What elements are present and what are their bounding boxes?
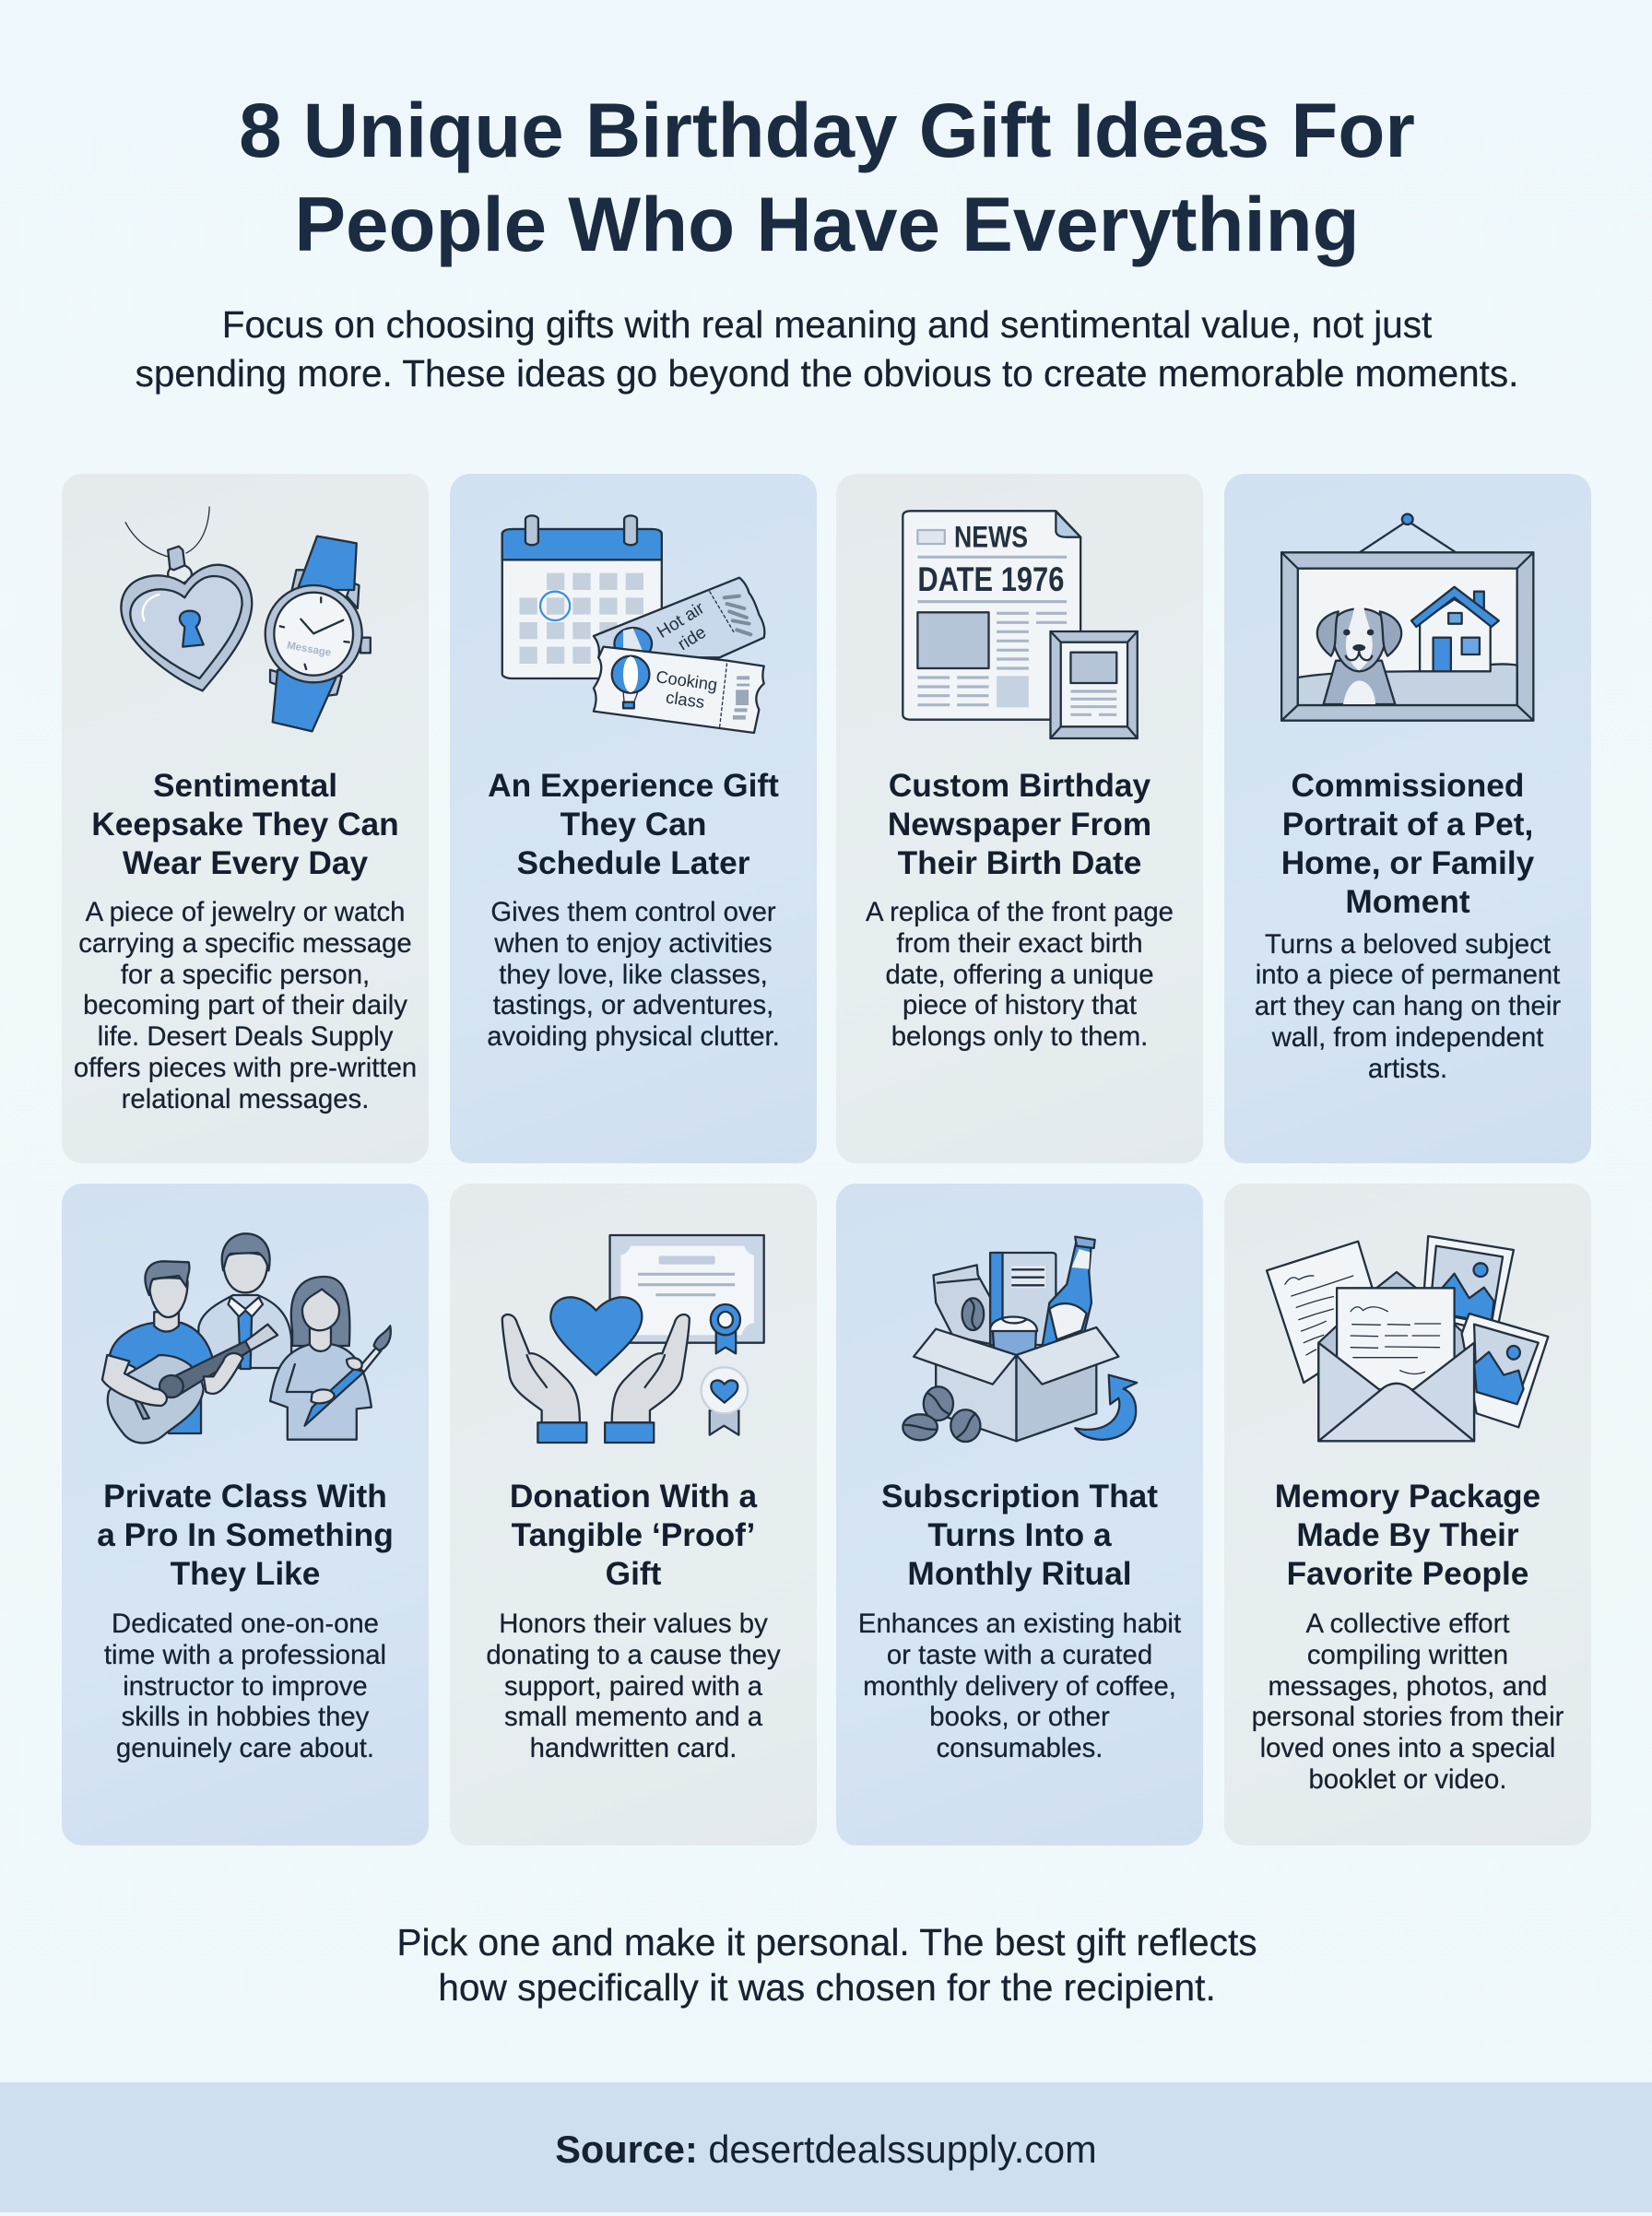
- title: 8 Unique Birthday Gift Ideas For: [239, 87, 1415, 173]
- card text: handwritten card.: [530, 1733, 737, 1763]
- card text: tastings, or adventures,: [493, 990, 773, 1020]
- card text: Portrait of a Pet,: [1282, 807, 1533, 843]
- card text: a Pro In Something: [97, 1517, 394, 1553]
- card text: Gives them control over: [490, 897, 776, 927]
- guitarist: [102, 1261, 277, 1443]
- card text: An Experience Gift: [488, 768, 779, 804]
- subtitle: Focus on choosing gifts with real meaning and sentimental value, not just: [222, 303, 1432, 346]
- instructor: [198, 1233, 291, 1369]
- card text: they love, like classes,: [499, 960, 768, 990]
- panel: sentimental keepsake: [62, 474, 429, 1163]
- envelope front: [1318, 1343, 1474, 1441]
- house: [1411, 587, 1499, 671]
- card text: life. Desert Deals Supply: [98, 1021, 393, 1052]
- footer: source: Source: desertdealssupply.com: [555, 2128, 1097, 2171]
- card text: [486, 1479, 781, 1763]
- closing message: Pick one and make it personal. The best gift reflects: [396, 1921, 1257, 1963]
- hands and heart: [502, 1297, 690, 1443]
- top right photo: [1422, 1236, 1514, 1334]
- card text: Turns Into a: [927, 1517, 1112, 1553]
- panel: private class: [62, 1184, 429, 1845]
- card text: Tangible ‘Proof’: [512, 1517, 755, 1553]
- card text: A piece of jewelry or watch: [86, 897, 405, 927]
- card text: becoming part of their daily: [83, 990, 407, 1020]
- locket necklace: [121, 507, 252, 690]
- card text: [865, 768, 1174, 1052]
- card text: Custom Birthday: [889, 768, 1150, 804]
- card text: personal stories from their: [1252, 1702, 1564, 1732]
- card text: consumables.: [937, 1733, 1103, 1763]
- card text: offers pieces with pre-written: [74, 1053, 417, 1083]
- newspaper: [903, 511, 1080, 720]
- card text: [97, 1479, 394, 1763]
- book: [990, 1253, 1056, 1345]
- card text: Subscription That: [881, 1479, 1158, 1515]
- card text: books, or other: [929, 1702, 1110, 1732]
- card text: wall, from independent: [1272, 1022, 1543, 1053]
- card text: [1252, 1479, 1564, 1795]
- icon: letters, photos, envelope: [1265, 1235, 1550, 1442]
- ticket: cooking class: [594, 647, 764, 733]
- ticket: hot air ride: ride: [675, 623, 710, 654]
- card text: for a specific person,: [121, 960, 370, 990]
- card text: genuinely care about.: [116, 1733, 374, 1763]
- handwritten page: [1267, 1242, 1386, 1383]
- card text: Newspaper From: [888, 807, 1151, 843]
- subtitle: spending more. These ideas go beyond the obvious to create memorable moments.: [136, 352, 1518, 395]
- card text: Keepsake They Can: [91, 807, 399, 843]
- ticket: cooking class: Cooking: [655, 666, 719, 694]
- arrow: recurring: [1075, 1375, 1137, 1440]
- card text: skills in hobbies they: [122, 1702, 369, 1732]
- card text: Their Birth Date: [898, 845, 1141, 881]
- card text: [858, 1479, 1182, 1763]
- card text: Moment: [1345, 884, 1470, 920]
- letter: [1337, 1288, 1455, 1389]
- panel: memory package: [1224, 1184, 1591, 1845]
- card text: [487, 768, 780, 1052]
- wristwatch: [266, 536, 371, 731]
- coffee cup: [990, 1316, 1037, 1364]
- card text: carrying a specific message: [78, 928, 412, 959]
- card text: belongs only to them.: [891, 1021, 1148, 1052]
- card text: They Like: [171, 1556, 320, 1592]
- ribbon seal: [711, 1304, 740, 1353]
- card text: Monthly Ritual: [907, 1556, 1132, 1592]
- card text: Made By Their: [1296, 1517, 1519, 1553]
- card text: or taste with a curated: [887, 1640, 1152, 1670]
- card text: A replica of the front page: [866, 897, 1174, 927]
- icon: heart locket and watch: [120, 506, 372, 732]
- card text: Home, or Family: [1281, 845, 1534, 881]
- card text: Memory Package: [1275, 1479, 1540, 1515]
- icon: subscription box: [902, 1235, 1138, 1444]
- card text: [74, 768, 417, 1114]
- card text: date, offering a unique: [885, 960, 1154, 990]
- card text: Private Class With: [103, 1479, 387, 1515]
- card text: piece of history that: [903, 990, 1137, 1020]
- card text: Commissioned: [1291, 768, 1525, 804]
- card text: [1255, 768, 1561, 1084]
- closing message: [396, 1921, 1257, 2009]
- card text: loved ones into a special: [1260, 1733, 1555, 1763]
- painter: [270, 1277, 391, 1440]
- card text: instructor to improve: [123, 1671, 368, 1702]
- coffee bag: [934, 1265, 1000, 1346]
- card text: Gift: [606, 1556, 661, 1592]
- panel: donation: [450, 1184, 817, 1845]
- icon: newspaper and frame: [902, 510, 1139, 739]
- panel: custom newspaper: [836, 474, 1203, 1163]
- card text: booklet or video.: [1309, 1764, 1506, 1795]
- wristwatch: Message: [286, 640, 332, 659]
- card text: into a piece of permanent: [1256, 960, 1560, 990]
- lower right photo: [1462, 1314, 1548, 1427]
- small framed copy: [1050, 631, 1138, 738]
- coffee beans: [903, 1386, 980, 1442]
- panel: experience gift: [450, 474, 817, 1163]
- card text: time with a professional: [104, 1640, 386, 1670]
- card text: art they can hang on their: [1255, 991, 1561, 1021]
- card text: artists.: [1368, 1054, 1447, 1084]
- cardboard box: [914, 1327, 1118, 1441]
- medal: [702, 1367, 748, 1435]
- closing message: how specifically it was chosen for the recipient.: [438, 1966, 1216, 2009]
- card text: They Can: [560, 807, 706, 843]
- card text: when to enjoy activities: [494, 928, 773, 959]
- card text: avoiding physical clutter.: [487, 1021, 780, 1052]
- ticket: hot air ride: Hot air: [654, 598, 708, 642]
- panel: commissioned portrait: [1224, 474, 1591, 1163]
- card text: Honors their values by: [499, 1609, 768, 1639]
- icon: framed portrait: [1280, 513, 1534, 722]
- subtitle: [136, 303, 1518, 395]
- icon: calendar and tickets: [502, 514, 765, 734]
- card text: monthly delivery of coffee,: [863, 1671, 1176, 1702]
- calendar: [502, 515, 662, 678]
- bottle: [1042, 1237, 1095, 1348]
- footer: source: [0, 2082, 1652, 2212]
- icon: hands, heart and certificate: [502, 1233, 765, 1444]
- card text: relational messages.: [122, 1084, 369, 1114]
- panel: subscription: [836, 1184, 1203, 1845]
- picture frame: [1281, 514, 1533, 721]
- card text: A collective effort: [1306, 1609, 1509, 1639]
- title: People Who Have Everything: [294, 181, 1360, 267]
- card text: Enhances an existing habit: [858, 1609, 1181, 1639]
- dog: [1317, 607, 1401, 704]
- card text: small memento and a: [504, 1702, 762, 1732]
- card text: messages, photos, and: [1268, 1671, 1547, 1702]
- newspaper: DATE 1976: [917, 560, 1064, 598]
- card text: Schedule Later: [516, 845, 750, 881]
- envelope back: [1318, 1272, 1474, 1441]
- card text: Dedicated one-on-one: [112, 1609, 379, 1639]
- card text: Donation With a: [510, 1479, 757, 1515]
- icon: people with instruments: [101, 1232, 392, 1444]
- card text: compiling written: [1307, 1640, 1508, 1670]
- certificate: [610, 1235, 764, 1343]
- newspaper: NEWS: [954, 520, 1028, 553]
- ticket: hot air ride: [594, 578, 764, 660]
- card text: Favorite People: [1287, 1556, 1528, 1592]
- card text: support, paired with a: [504, 1671, 762, 1702]
- card text: Wear Every Day: [123, 845, 368, 881]
- card text: from their exact birth: [896, 928, 1143, 959]
- ticket: cooking class: class: [665, 687, 706, 712]
- card text: donating to a cause they: [486, 1640, 781, 1670]
- card text: Turns a beloved subject: [1265, 929, 1551, 959]
- card text: Sentimental: [153, 768, 337, 804]
- title: [239, 87, 1415, 267]
